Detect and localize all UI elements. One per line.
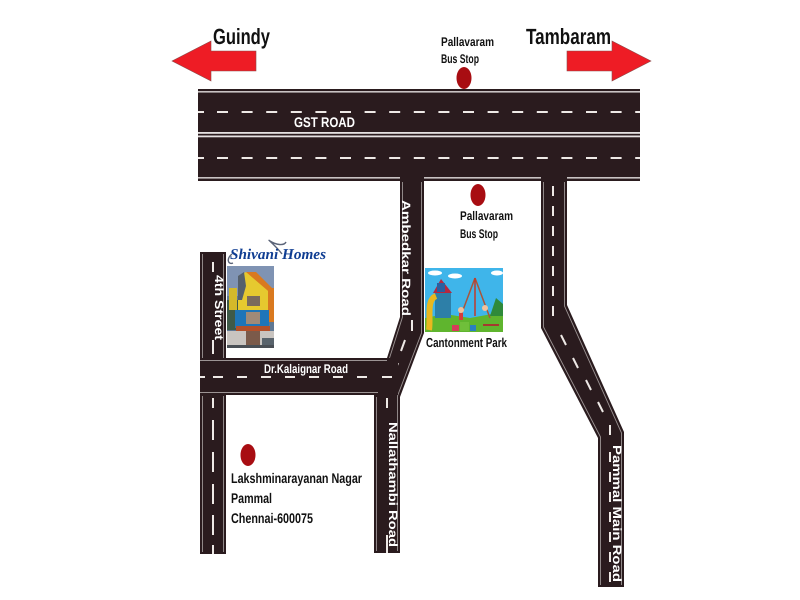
arrow: to Guindy (172, 41, 256, 81)
label: Ambedkar Road: Ambedkar Road (399, 200, 413, 316)
logo: Shivani Homes (228, 240, 326, 263)
marker: top bus stop (456, 67, 472, 89)
text block: address: Chennai-600075 (231, 510, 313, 526)
label: top Pallavaram Bus Stop: Bus Stop (441, 52, 479, 66)
label: lower Pallavaram Bus Stop: Bus Stop (460, 227, 498, 241)
marker: lower bus stop (470, 184, 486, 206)
label: GST ROAD: GST ROAD (294, 114, 355, 130)
image: children's park (425, 268, 503, 332)
label: Cantonment Park: Cantonment Park (426, 335, 508, 350)
heading: Guindy: Guindy (213, 24, 271, 49)
label: Pammal Main Road: Pammal Main Road (610, 445, 624, 582)
logo: Shivani Homes: Shivani Homes (230, 247, 326, 263)
arrow: to Tambaram (567, 41, 651, 81)
road: GST Road (198, 89, 640, 181)
road: Ambedkar and Nallathambi Road (374, 171, 424, 553)
marker: Shivani Homes location (240, 444, 256, 466)
label: 4th Street: 4th Street (212, 275, 226, 340)
label: top Pallavaram Bus Stop: Pallavaram (441, 35, 494, 49)
road: Pammal Main Road (541, 178, 624, 587)
heading: Tambaram: Tambaram (526, 24, 611, 49)
text block: address: Pammal (231, 490, 272, 506)
label: Dr.Kalaignar Road: Dr.Kalaignar Road (264, 362, 348, 376)
label: lower Pallavaram Bus Stop: Pallavaram (460, 209, 513, 223)
text block: address: Lakshminarayanan Nagar (231, 470, 362, 486)
label: Nallathambi Road: Nallathambi Road (386, 422, 400, 547)
image: apartment building (227, 266, 274, 348)
road: Dr.Kalaignar Road (200, 358, 398, 395)
road: 4th Street (200, 252, 226, 554)
